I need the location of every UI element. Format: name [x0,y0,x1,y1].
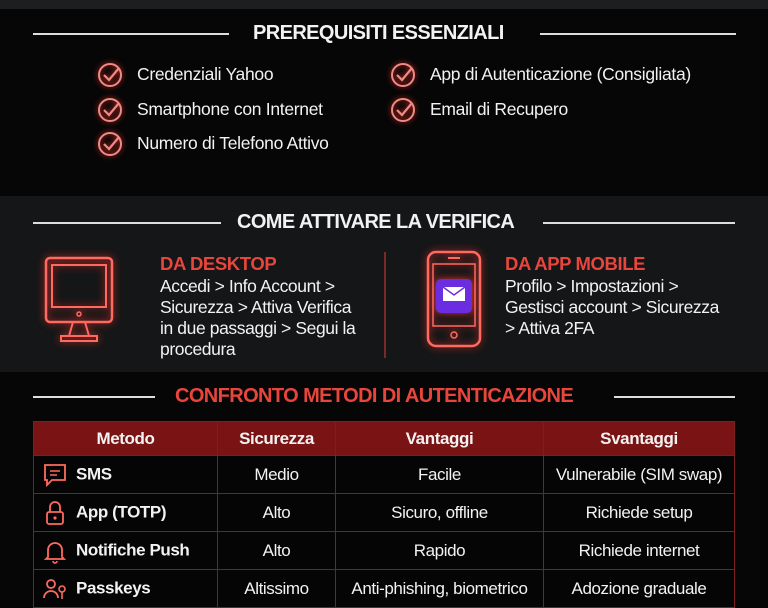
top strip [0,0,768,9]
table: comparison: Metodo [96,428,155,448]
text: da desktop: Sicurezza > Attiva Verifica [160,297,351,317]
table: comparison: Adozione graduale [572,578,706,598]
heading: come attivare: COME ATTIVARE LA VERIFICA [237,211,514,233]
table: comparison: Rapido [414,540,465,560]
text: da app mobile: > Attiva 2FA [505,318,594,338]
item: app: App di Autenticazione (Consigliata) [430,64,691,84]
table: comparison [33,421,735,608]
table: comparison: Passkeys [76,578,150,597]
table: comparison: Alto [263,540,290,560]
icon: desktop monitor [38,250,120,348]
text: da desktop: in due passaggi > Segui la [160,318,355,338]
heading: confronto: CONFRONTO METODI DI AUTENTICAZIONE [175,385,573,407]
item: email [386,94,568,126]
text: da desktop [160,253,356,359]
heading: prerequisiti: PREREQUISITI ESSENZIALI [253,22,504,44]
table: comparison: Svantaggi [600,428,678,448]
table: comparison: App (TOTP) [76,502,166,521]
text: da app mobile: DA APP MOBILE [505,253,645,274]
text: da app mobile: Gestisci account > Sicurezza [505,297,719,317]
item: email: Email di Recupero [430,99,568,119]
table: comparison: Richiede setup [586,502,692,522]
table: comparison: Alto [263,502,290,522]
item: smartphone [94,94,323,126]
text: da desktop: Accedi > Info Account > [160,276,335,296]
item: numero: Numero di Telefono Attivo [137,133,329,153]
item: numero [94,128,329,160]
icon: phone with app [420,244,488,354]
item: credenziali: Credenziali Yahoo [137,64,273,84]
table: comparison: Anti-phishing, biometrico [351,578,528,598]
table: comparison: Facile [418,464,461,484]
panel: prerequisites [0,9,768,196]
text: da desktop: DA DESKTOP [160,253,276,274]
item: credenziali [94,58,273,92]
item: smartphone: Smartphone con Internet [137,99,323,119]
table: comparison: Vantaggi [406,428,473,448]
item: app [386,58,691,92]
panel: come attivare [0,196,768,372]
table: comparison: Altissimo [244,578,309,598]
text: da desktop: procedura [160,339,235,359]
text: da app mobile: Profilo > Impostazioni > [505,276,678,296]
table: comparison: Notifiche Push [76,540,189,559]
text: da app mobile [505,253,720,338]
table: comparison: Vulnerabile (SIM swap) [556,464,722,484]
table: comparison: Medio [254,464,299,484]
table: comparison: Richiede internet [579,540,699,560]
table: comparison: SMS [76,464,112,483]
table: comparison: Sicuro, offline [391,502,488,522]
table: comparison: Sicurezza [239,428,314,448]
